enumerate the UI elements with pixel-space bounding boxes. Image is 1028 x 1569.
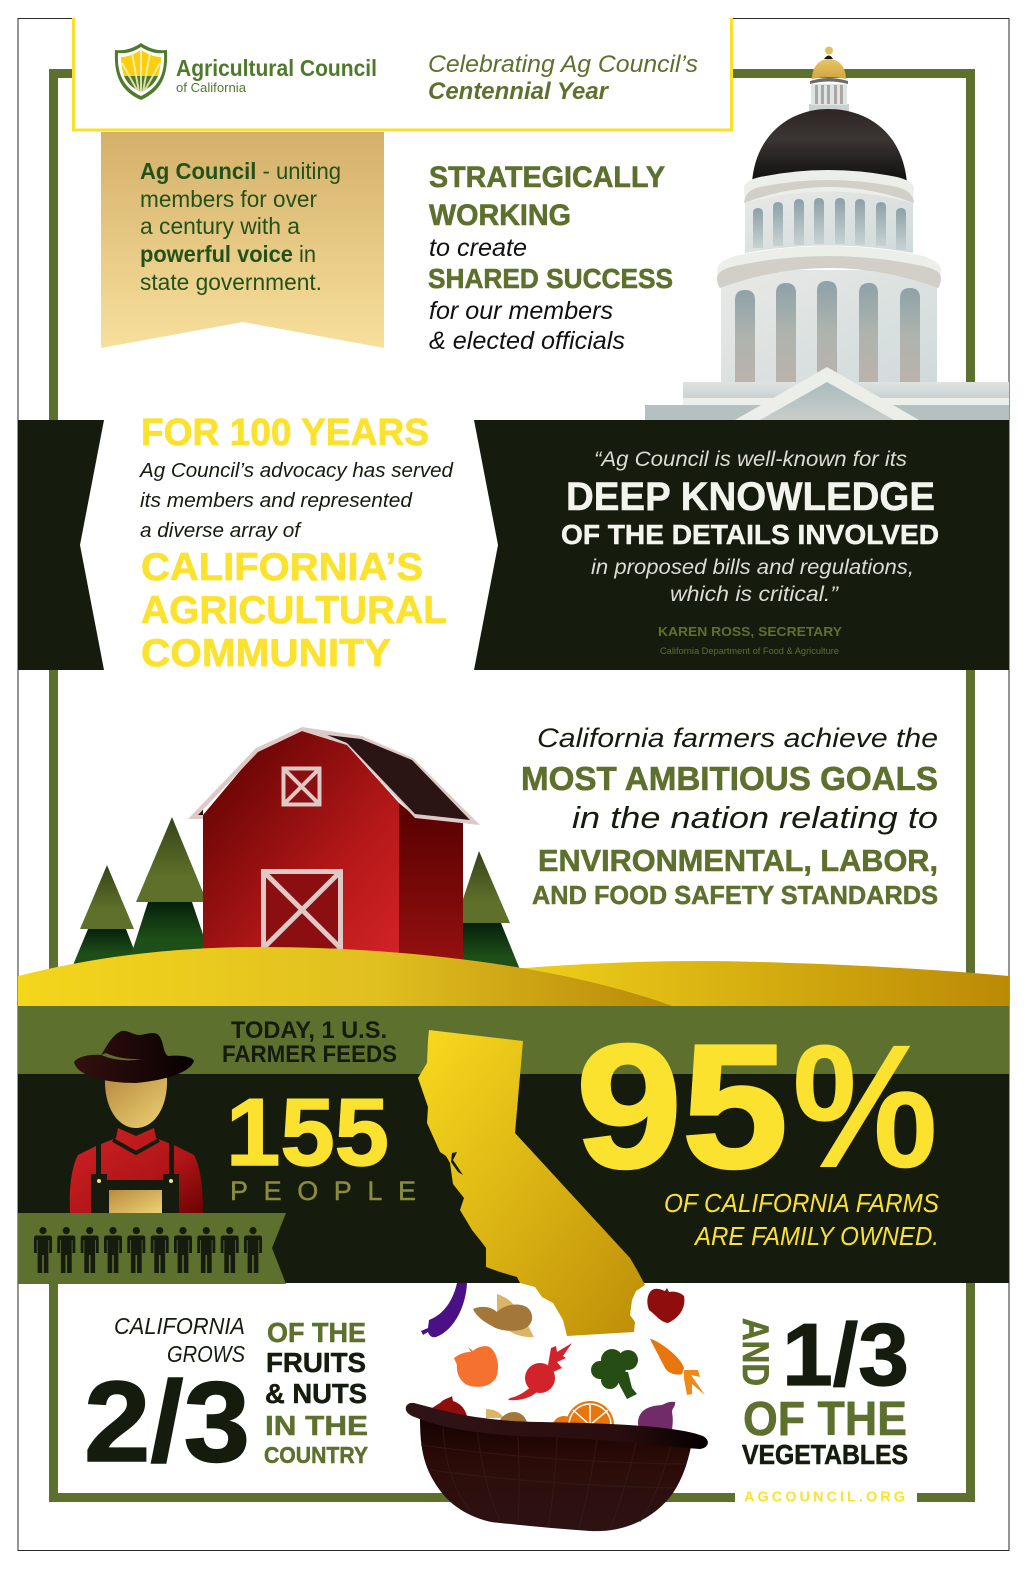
- fruits and nuts text: [264, 1317, 368, 1468]
- ribbon text: state government.: [140, 269, 322, 295]
- vegetables one third text: AND: [735, 1318, 776, 1386]
- row of ten person icons: [34, 1227, 262, 1273]
- quote attribution: KAREN ROSS, SECRETARY: [658, 624, 842, 639]
- quote attribution: California Department of Food & Agriculture: [660, 646, 839, 656]
- two thirds label: GROWS: [167, 1341, 246, 1367]
- quote attribution: [658, 624, 842, 656]
- nuts: [473, 1294, 534, 1337]
- number 155: 155: [226, 1079, 389, 1186]
- people label: PEOPLE: [230, 1176, 416, 1206]
- eggplant: [421, 1283, 467, 1337]
- family owned caption: [664, 1188, 940, 1251]
- quote text block: [561, 448, 939, 656]
- dark band left tab: [18, 420, 104, 670]
- strategy text block: for our members: [429, 297, 613, 325]
- California map: [418, 1030, 645, 1336]
- strategy text block: STRATEGICALLY: [429, 161, 665, 194]
- vegetables one third text: VEGETABLES: [742, 1439, 908, 1470]
- fruits and nuts text: FRUITS: [266, 1347, 366, 1378]
- fruits and nuts text: COUNTRY: [264, 1442, 368, 1468]
- barn window: [281, 766, 322, 807]
- orange slices: [552, 1401, 614, 1449]
- ribbon text: [140, 158, 341, 295]
- farmer overalls: [91, 1143, 179, 1213]
- today text: [222, 1017, 397, 1068]
- goals text block: [521, 723, 938, 910]
- San Francisco bay detail: [451, 1152, 463, 1175]
- nuts in basket: [486, 1409, 527, 1422]
- purple onion: [638, 1402, 675, 1430]
- farmer face: [105, 1078, 167, 1128]
- illustration: trees: [73, 817, 521, 972]
- for 100 years text block: [139, 412, 454, 675]
- strategy text block: to create: [429, 234, 527, 262]
- family owned caption: ARE FAMILY OWNED.: [693, 1221, 939, 1251]
- basket bowl: [420, 1418, 692, 1531]
- goals text block: ENVIRONMENTAL, LABOR,: [538, 843, 938, 878]
- quote text block: DEEP KNOWLEDGE: [566, 475, 935, 519]
- broccoli: [591, 1349, 638, 1399]
- goals text block: MOST AMBITIOUS GOALS: [521, 760, 938, 797]
- basket weave: [421, 1425, 685, 1530]
- strategy text block: & elected officials: [429, 327, 625, 355]
- dark band quote panel: [474, 420, 1009, 670]
- fruits and nuts text: & NUTS: [265, 1378, 367, 1409]
- logo wordmark: Agricultural Council: [176, 55, 377, 81]
- for 100 years text block: its members and represented: [140, 490, 413, 512]
- quote text block: in proposed bills and regulations,: [591, 556, 914, 579]
- goals text block: California farmers achieve the: [537, 723, 938, 753]
- vegetables one third text: [735, 1305, 909, 1470]
- farmer shirt: [70, 1128, 203, 1213]
- goals text block: AND FOOD SAFETY STANDARDS: [532, 880, 938, 910]
- ribbon text: powerful voice in: [140, 241, 316, 267]
- for 100 years text block: Ag Council’s advocacy has served: [139, 460, 454, 482]
- ribbon text: members for over: [140, 186, 317, 212]
- header tagline: Centennial Year: [428, 78, 610, 105]
- logo wordmark: of California: [176, 80, 247, 95]
- website address: AGCOUNCIL.ORG: [744, 1490, 905, 1506]
- farmer hat: [74, 1031, 194, 1083]
- today text: TODAY, 1 U.S.: [231, 1017, 387, 1044]
- illustration: barn: [188, 727, 480, 960]
- header tagline: [428, 51, 698, 105]
- illustration: golden hills: [18, 947, 1009, 1006]
- strategy text block: SHARED SUCCESS: [428, 263, 673, 294]
- basket: [406, 1403, 708, 1531]
- beet: [508, 1343, 572, 1400]
- for 100 years text block: a diverse array of: [140, 520, 303, 542]
- two thirds label: 2/3: [84, 1359, 250, 1486]
- vegetables falling and basket contents: [421, 1283, 705, 1449]
- for 100 years text block: FOR 100 YEARS: [141, 412, 429, 454]
- apple in basket: [432, 1396, 468, 1420]
- for 100 years text block: CALIFORNIA’S: [141, 546, 423, 589]
- barn door: [261, 869, 343, 951]
- quote text block: which is critical.”: [670, 583, 839, 606]
- green band: [18, 1006, 1009, 1074]
- gold ribbon: [101, 132, 384, 348]
- strategy text block: WORKING: [429, 199, 571, 232]
- quote text block: “Ag Council is well-known for its: [594, 448, 908, 471]
- header box: [74, 18, 732, 130]
- logo: Agricultural Council shield: [115, 43, 167, 100]
- vegetables one third text: 1/3: [782, 1305, 909, 1404]
- fruits and nuts text: IN THE: [265, 1410, 368, 1441]
- quote text block: OF THE DETAILS INVOLVED: [561, 519, 939, 550]
- fruits and nuts text: OF THE: [267, 1317, 366, 1348]
- illustration: farmer: [70, 1031, 203, 1213]
- vegetables one third text: OF THE: [743, 1393, 907, 1446]
- goals text block: in the nation relating to: [572, 800, 938, 835]
- carrot: [650, 1339, 705, 1395]
- apple dark: [647, 1288, 684, 1323]
- for 100 years text block: COMMUNITY: [141, 632, 391, 675]
- two thirds label: CALIFORNIA: [114, 1313, 245, 1339]
- number 95%: 95: [576, 1009, 788, 1205]
- number 95%: [576, 1009, 938, 1205]
- orange apple: [454, 1346, 498, 1387]
- dark band: [18, 1074, 1009, 1283]
- today text: FARMER FEEDS: [222, 1041, 397, 1068]
- strategy text block: [428, 161, 673, 355]
- basket rim: [406, 1403, 708, 1449]
- family owned caption: OF CALIFORNIA FARMS: [664, 1188, 940, 1218]
- for 100 years text block: AGRICULTURAL: [141, 589, 447, 632]
- ribbon text: Ag Council - uniting: [140, 158, 341, 184]
- number 95%: %: [792, 1009, 938, 1205]
- header tagline: Celebrating Ag Council’s: [428, 51, 698, 78]
- illustration: state capitol: [645, 46, 1009, 420]
- logo wordmark: [176, 55, 377, 95]
- ribbon text: a century with a: [140, 213, 300, 239]
- ribbon with people icons: [18, 1213, 286, 1284]
